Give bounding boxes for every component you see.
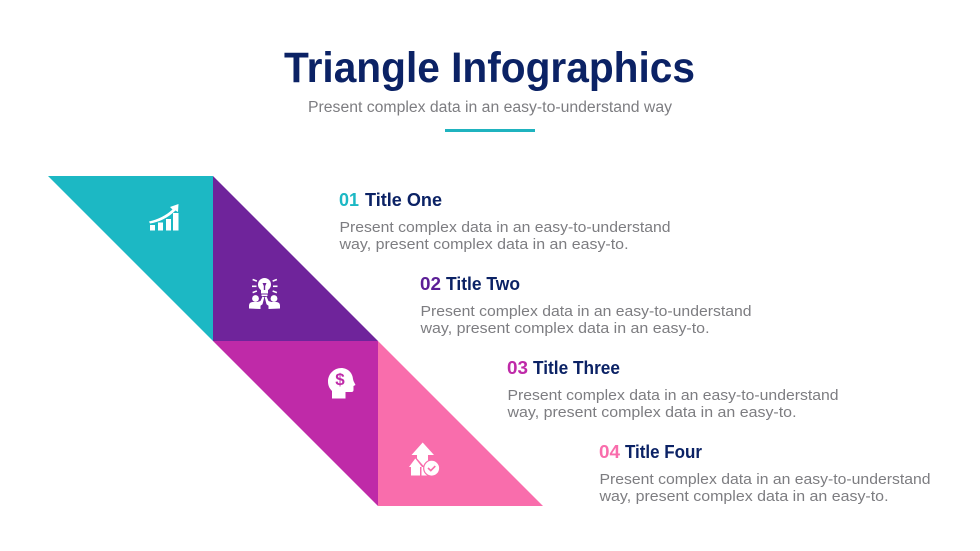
icon: people with light bulb bbox=[249, 278, 280, 309]
title underline bbox=[445, 129, 535, 132]
number 02: 02 bbox=[420, 274, 441, 294]
icon: head with dollar sign: $ bbox=[335, 370, 345, 389]
triangle: magenta with head icon bbox=[213, 341, 378, 506]
triangle: teal with chart icon bbox=[48, 176, 213, 341]
icon: rising bar chart bbox=[149, 204, 178, 230]
number 01: 01 bbox=[339, 190, 359, 210]
body 04: Present complex data in an easy-to-understand bbox=[600, 471, 930, 488]
title: Triangle Infographics bbox=[284, 44, 695, 92]
triangle: purple with idea icon bbox=[213, 176, 378, 341]
icon: up arrows with check badge bbox=[406, 442, 440, 477]
item 03 bbox=[506, 358, 838, 421]
body 01: Present complex data in an easy-to-understand bbox=[340, 219, 670, 236]
body 02: Present complex data in an easy-to-understand bbox=[420, 303, 752, 320]
icon: head with dollar sign bbox=[328, 368, 356, 398]
heading 02: Title Two bbox=[446, 274, 520, 294]
body 02: way, present complex data in an easy-to. bbox=[419, 320, 710, 337]
item 04 bbox=[598, 442, 930, 505]
number 03: 03 bbox=[507, 358, 528, 378]
body 04: way, present complex data in an easy-to. bbox=[598, 488, 888, 505]
triangle: pink with arrows icon bbox=[378, 341, 543, 506]
heading 01: Title One bbox=[365, 190, 442, 210]
item 01 bbox=[338, 190, 670, 253]
subtitle: Present complex data in an easy-to-understand way bbox=[308, 99, 672, 116]
heading 03: Title Three bbox=[533, 358, 620, 378]
item 02 bbox=[419, 274, 752, 337]
body 03: way, present complex data in an easy-to. bbox=[506, 404, 796, 421]
body 01: way, present complex data in an easy-to. bbox=[338, 236, 628, 253]
number 04: 04 bbox=[599, 442, 620, 462]
heading 04: Title Four bbox=[625, 442, 702, 462]
body 03: Present complex data in an easy-to-understand bbox=[508, 387, 838, 404]
